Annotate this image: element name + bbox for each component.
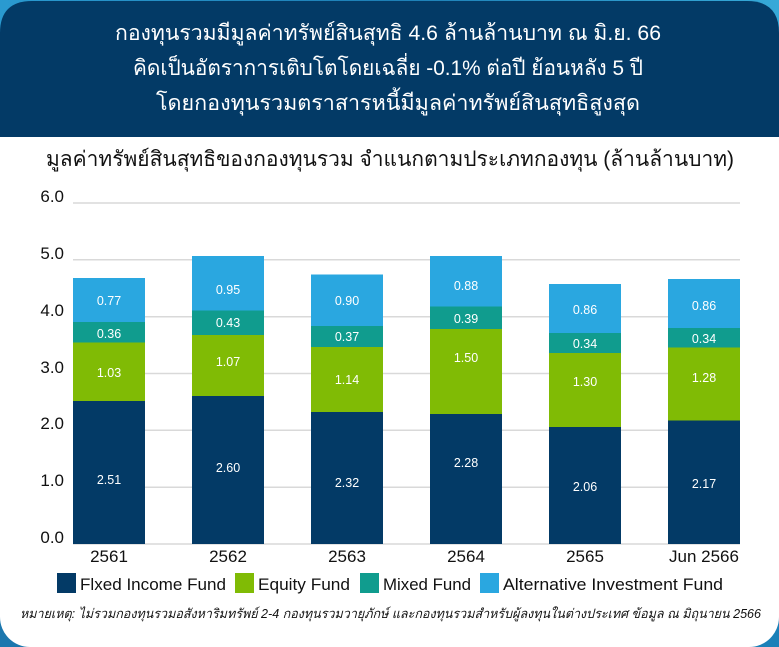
bar: 2561: 0.77 (97, 294, 121, 308)
x axis labels: 2564 (447, 547, 485, 566)
bar: 2562: 1.07 (216, 355, 240, 369)
bar: 2565: 0.34 (573, 337, 597, 351)
x axis labels: 2565 (566, 547, 604, 566)
bar: 2561: 1.03 (97, 366, 121, 380)
bar: 2561: 2.51 (97, 473, 121, 487)
bar: Jun 2566 (668, 279, 740, 544)
bar: 2561 (73, 278, 145, 544)
bar: 2564: 0.39 (454, 312, 478, 326)
x axis labels: 2562 (209, 547, 247, 566)
bar: 2565 (549, 284, 621, 544)
header text: โดยกองทุนรวมตราสารหนี้มีมูลค่าทรัพย์สินสุทธิสูงสุด (156, 87, 640, 116)
bar: 2564: 2.28 (454, 456, 478, 470)
y axis gridlines (73, 203, 740, 544)
bar: Jun 2566: 1.28 (692, 371, 716, 385)
y axis labels: 0.0 (40, 528, 64, 547)
legend (57, 573, 723, 594)
bar: 2563 (311, 274, 383, 544)
legend: fixed income: Flxed Income Fund (80, 575, 226, 594)
x axis labels (90, 547, 739, 566)
footnote: หมายเหตุ: ไม่รวมกองทุนรวมอสังหาริมทรัพย์ 2-4 กองทุนรวมวายุภักษ์ และกองทุนรวมสำหรับผู้ลงทุนในต่างประเทศ ข้อมูล ณ มิถุนายน 2566 (20, 606, 762, 622)
y axis labels (40, 187, 64, 547)
y axis labels: 5.0 (40, 244, 64, 263)
x axis labels: Jun 2566 (669, 547, 739, 566)
legend: alternative: Alternative Investment Fund (503, 575, 723, 594)
bar: 2565: 2.06 (573, 480, 597, 494)
header banner (0, 1, 779, 137)
bar: 2565: 0.86 (573, 303, 597, 317)
bar: 2562: 2.60 (216, 461, 240, 475)
bar: Jun 2566: 2.17 (692, 477, 716, 491)
legend: mixed: Mixed Fund (383, 575, 471, 594)
bar: 2561: 0.36 (97, 327, 121, 341)
bar: 2563: 2.32 (335, 476, 359, 490)
bar: 2563: 0.90 (335, 294, 359, 308)
stacked bar chart (40, 187, 740, 566)
bar: 2563: 0.37 (335, 330, 359, 344)
bar: 2564 (430, 256, 502, 544)
bar: 2565: 1.30 (573, 375, 597, 389)
x axis labels: 2561 (90, 547, 128, 566)
chart title: มูลค่าทรัพย์สินสุทธิของกองทุนรวม จำแนกตามประเภทกองทุน (ล้านล้านบาท) (46, 147, 734, 172)
header text: คิดเป็นอัตราการเติบโตโดยเฉลี่ย -0.1% ต่อปี ย้อนหลัง 5 ปี (133, 53, 643, 80)
bar: Jun 2566: 0.34 (692, 332, 716, 346)
y axis labels: 4.0 (40, 301, 64, 320)
header text: กองทุนรวมมีมูลค่าทรัพย์สินสุทธิ 4.6 ล้านล้านบาท ณ มิ.ย. 66 (115, 21, 661, 46)
bar: 2562: 0.95 (216, 283, 240, 297)
y axis labels: 6.0 (40, 187, 64, 206)
header text (115, 21, 661, 116)
bar: 2562: 0.43 (216, 316, 240, 330)
y axis labels: 1.0 (40, 471, 64, 490)
bar: Jun 2566: 0.86 (692, 299, 716, 313)
bar: 2563: 1.14 (335, 373, 359, 387)
legend: equity: Equity Fund (258, 575, 350, 594)
bar: 2564: 1.50 (454, 351, 478, 365)
bar: 2564: 0.88 (454, 279, 478, 293)
y axis labels: 2.0 (40, 414, 64, 433)
x axis labels: 2563 (328, 547, 366, 566)
y axis labels: 3.0 (40, 358, 64, 377)
bar: 2562 (192, 256, 264, 544)
